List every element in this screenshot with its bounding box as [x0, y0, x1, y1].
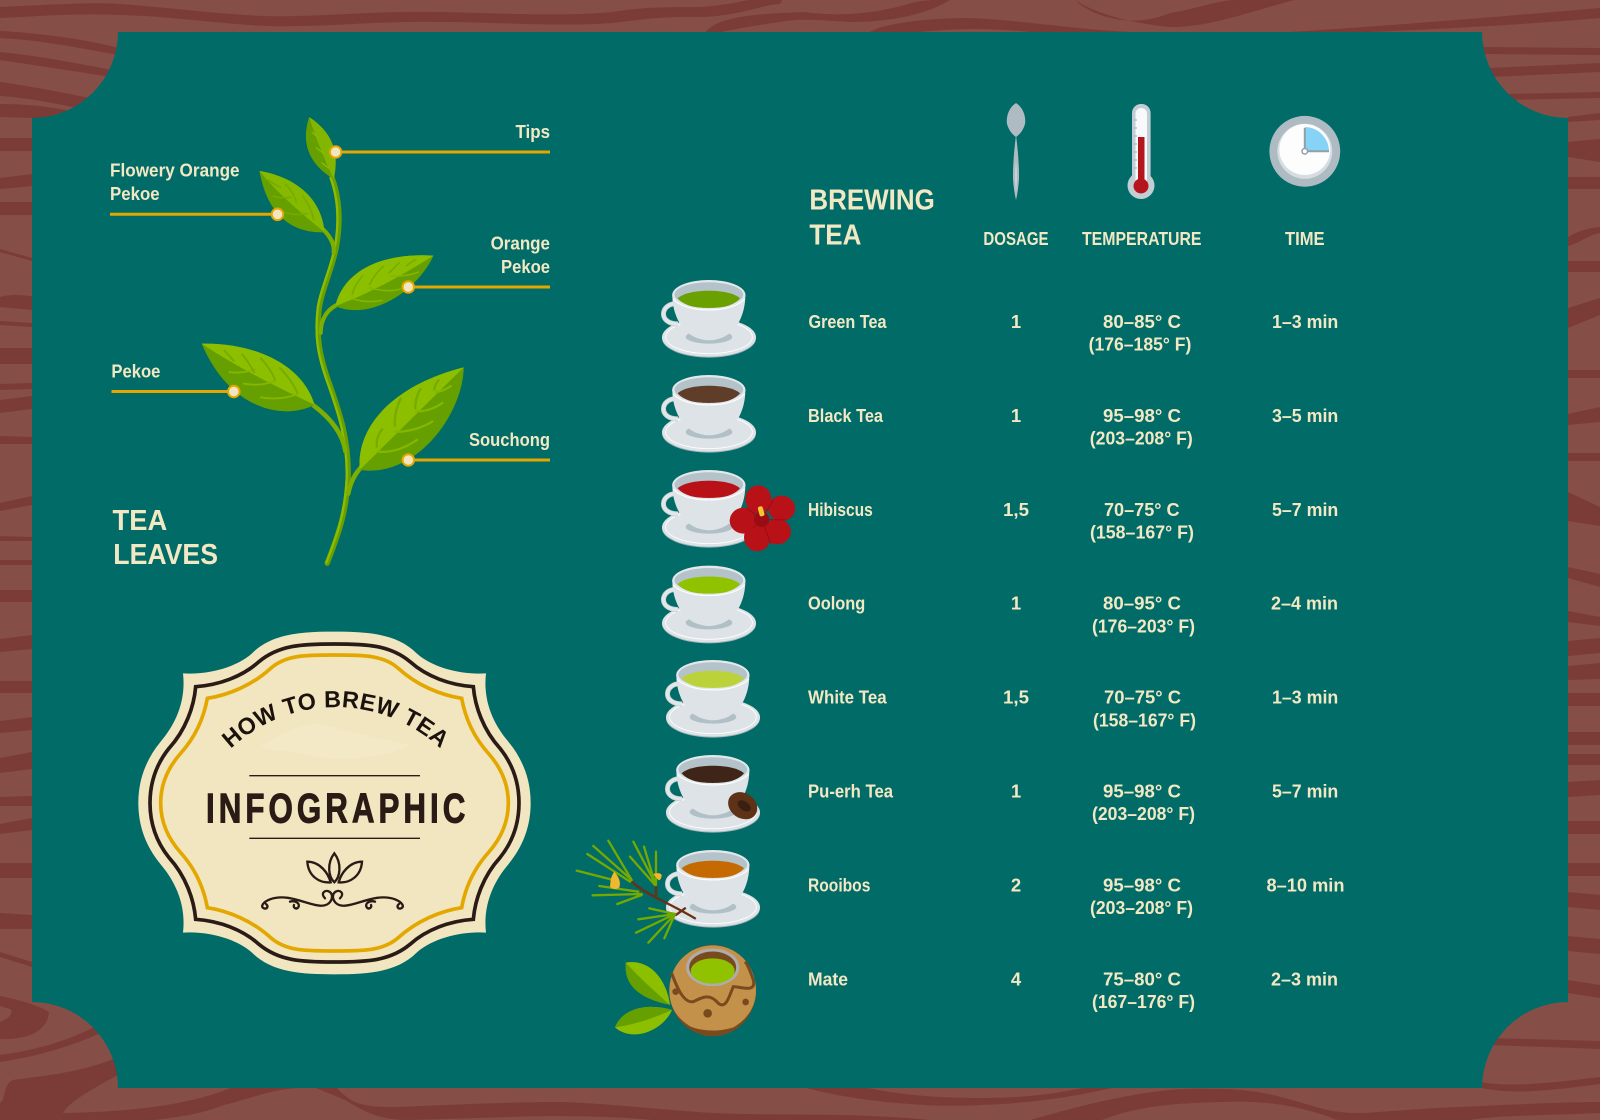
row: Oolong: (176–203° F) — [1092, 615, 1195, 636]
row: Mate — [615, 945, 1338, 1036]
row: Oolong: 80–95° C — [1103, 593, 1181, 614]
heading: tea leaves: LEAVES — [113, 539, 218, 571]
icon: pu-erh bean — [723, 787, 763, 825]
row: Pu-erh Tea: 1 — [1011, 780, 1021, 802]
icon: spoon — [1007, 103, 1025, 200]
row: Green Tea: 80–85° C — [1103, 311, 1181, 332]
callout: Tips: Tips — [516, 121, 550, 142]
callout: Flowery Orange Pekoe — [110, 159, 283, 220]
heading: brewing tea: TEA — [809, 220, 861, 252]
tea leaves plant illustration — [202, 117, 464, 563]
row: Rooibos: 8–10 min — [1266, 874, 1344, 895]
column headings: TIME — [1285, 228, 1325, 249]
heading: brewing tea — [809, 184, 935, 252]
heading: tea leaves: TEA — [112, 505, 167, 537]
callout: Orange Pekoe: Orange — [491, 232, 550, 254]
icon: thermometer — [1128, 104, 1154, 199]
icon: mate gourd — [615, 945, 756, 1036]
callout: Flowery Orange Pekoe: Pekoe — [110, 183, 160, 204]
row: Hibiscus: 5–7 min — [1272, 499, 1338, 520]
row: Oolong: 1 — [1011, 593, 1021, 614]
row: Oolong: 2–4 min — [1271, 593, 1338, 614]
row: Green Tea: 1–3 min — [1272, 311, 1338, 332]
row: Oolong: Oolong — [808, 593, 865, 614]
row: White Tea: White Tea — [808, 687, 887, 708]
row: Green Tea: 1 — [1011, 311, 1021, 332]
row: Rooibos: 95–98° C — [1103, 874, 1181, 895]
leaf: Pekoe — [202, 344, 315, 411]
row: Black Tea: 3–5 min — [1272, 405, 1338, 426]
row: Pu-erh Tea — [666, 755, 1338, 833]
row: Green Tea: (176–185° F) — [1089, 334, 1191, 355]
row: Hibiscus: 70–75° C — [1104, 499, 1180, 520]
row: Mate: (167–176° F) — [1092, 991, 1195, 1012]
row: Mate: 75–80° C — [1103, 968, 1181, 989]
cup: black tea — [662, 375, 756, 453]
row: Mate: 4 — [1011, 968, 1022, 989]
badge ornament — [262, 853, 403, 909]
row: White Tea: (158–167° F) — [1093, 709, 1196, 730]
leaf: Souchong — [359, 367, 464, 471]
cup: pu-erh tea — [666, 755, 760, 833]
stem — [314, 178, 362, 563]
row: Pu-erh Tea: (203–208° F) — [1092, 803, 1195, 824]
cup: oolong — [662, 566, 756, 643]
cup: white tea — [666, 660, 760, 738]
badge arc title: HOW TO BREW TEA — [221, 691, 446, 748]
row: White Tea: 1,5 — [1003, 687, 1029, 708]
callout: Pekoe: Pekoe — [111, 360, 160, 381]
row: Pu-erh Tea: Pu-erh Tea — [808, 780, 894, 802]
badge: how to brew tea infographic — [138, 632, 531, 974]
row: Hibiscus: Hibiscus — [808, 499, 873, 520]
row: Black Tea: Black Tea — [808, 405, 884, 426]
cup: hibiscus — [662, 470, 756, 548]
callout: Tips — [330, 121, 550, 158]
row: Pu-erh Tea: 5–7 min — [1272, 780, 1338, 802]
icon: rooibos branch — [577, 841, 695, 943]
cup: rooibos — [666, 850, 760, 928]
row: Rooibos: 2 — [1011, 874, 1021, 895]
row: Mate: Mate — [808, 968, 848, 989]
column headings — [983, 228, 1325, 249]
icon: clock — [1269, 116, 1340, 187]
leaf: Orange Pekoe — [335, 255, 434, 310]
callout: Souchong: Souchong — [469, 429, 550, 450]
row: Black Tea: 1 — [1011, 405, 1021, 426]
row: Oolong — [662, 566, 1338, 643]
cup: green tea — [662, 280, 756, 358]
leaf: Tips — [306, 117, 336, 179]
row: Hibiscus: 1,5 — [1003, 499, 1029, 520]
callout: Flowery Orange Pekoe: Flowery Orange — [110, 159, 240, 180]
callout: Orange Pekoe: Pekoe — [501, 256, 550, 277]
callout: Pekoe — [111, 360, 240, 397]
heading: tea leaves — [112, 505, 218, 571]
row: Rooibos: Rooibos — [808, 874, 870, 895]
row: White Tea — [666, 660, 1338, 738]
column headings: TEMPERATURE — [1082, 228, 1202, 249]
badge main word: INFOGRAPHIC — [206, 784, 469, 831]
callout: Orange Pekoe — [402, 232, 550, 293]
column headings: DOSAGE — [983, 228, 1049, 249]
row: Black Tea: 95–98° C — [1103, 405, 1181, 426]
row: Pu-erh Tea: 95–98° C — [1103, 780, 1181, 802]
row: Green Tea: Green Tea — [808, 311, 887, 332]
row: Black Tea: (203–208° F) — [1090, 428, 1193, 449]
row: Rooibos: (203–208° F) — [1090, 897, 1193, 918]
row: Mate: 2–3 min — [1271, 968, 1338, 989]
row: White Tea: 70–75° C — [1104, 687, 1181, 708]
heading: brewing tea: BREWING — [809, 184, 935, 216]
callout: Souchong — [402, 429, 550, 466]
row: Green Tea — [662, 280, 1338, 358]
leaf: Flowery Orange Pekoe — [259, 171, 324, 232]
row: White Tea: 1–3 min — [1272, 687, 1338, 708]
icon: hibiscus flower — [730, 485, 795, 551]
row: Black Tea — [662, 375, 1338, 453]
row: Rooibos — [577, 841, 1344, 943]
row: Hibiscus — [662, 470, 1338, 551]
row: Hibiscus: (158–167° F) — [1090, 522, 1194, 542]
